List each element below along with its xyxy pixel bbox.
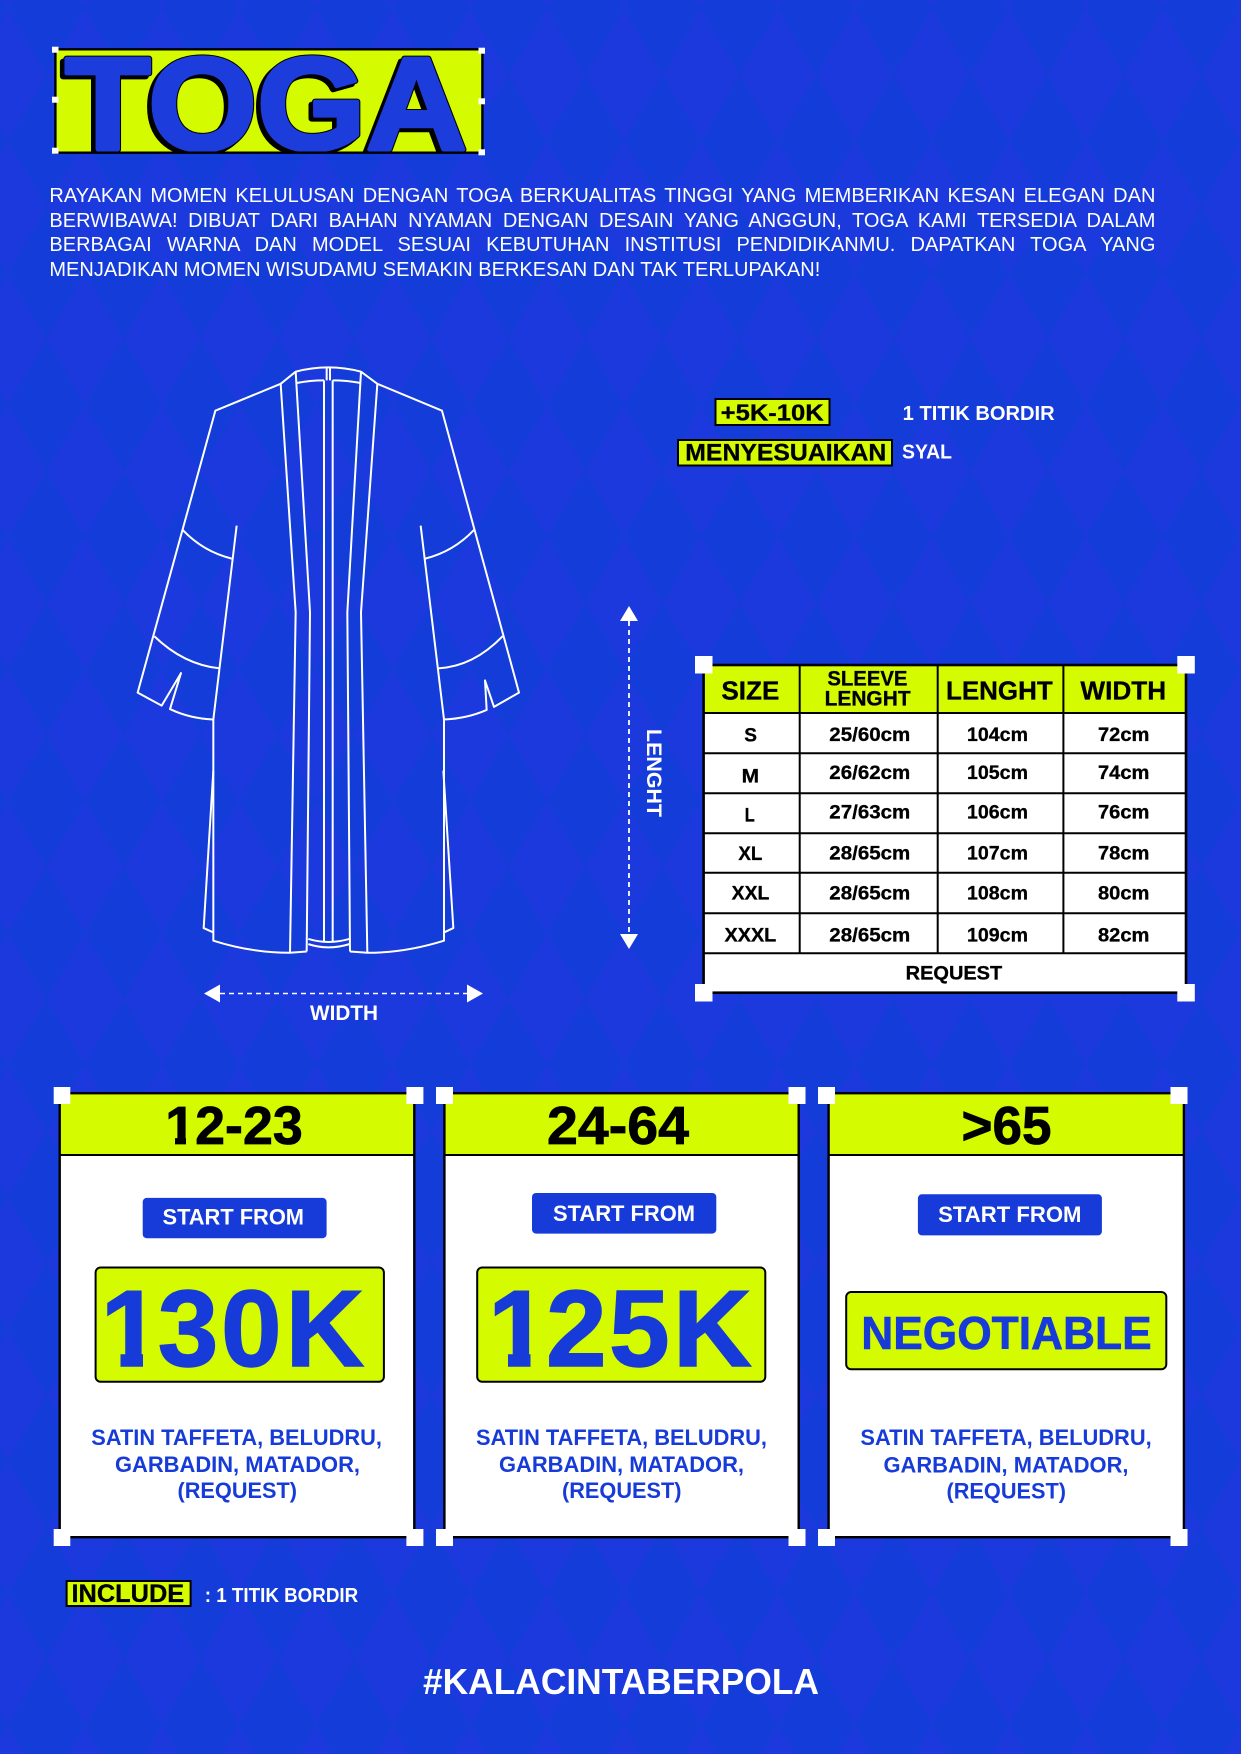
title: TOGA: TOGA: [65, 30, 467, 178]
table rows: M: [742, 766, 759, 787]
table rows: 105cm: [967, 763, 1028, 784]
materials: [91, 1425, 382, 1503]
materials: [860, 1425, 1152, 1504]
add-on: sash price: MENYESUAIKAN: [685, 440, 886, 467]
table rows: 107cm: [967, 843, 1028, 864]
table rows: 28/65cm: [829, 926, 910, 947]
start from label: START FROM: [162, 1205, 304, 1230]
panel: price over 65: [818, 1087, 1188, 1546]
table rows: 109cm: [967, 926, 1028, 947]
note: include: INCLUDE: [72, 1580, 184, 1608]
table rows: L: [745, 806, 755, 827]
table rows: XXL: [732, 883, 770, 904]
intro paragraph: MENJADIKAN MOMEN WISUDAMU SEMAKIN BERKESAN DAN TAK TERLUPAKAN!: [49, 259, 820, 281]
quantity range: 24-64: [547, 1096, 689, 1156]
note: include: : 1 TITIK BORDIR: [205, 1585, 359, 1607]
add-on: embroidery price: 1 TITIK BORDIR: [903, 403, 1055, 425]
materials: GARBADIN, MATADOR,: [884, 1452, 1128, 1478]
table rows: 74cm: [1098, 763, 1149, 784]
price: 125K: [488, 1268, 752, 1390]
price: NEGOTIABLE: [861, 1307, 1152, 1359]
materials: [476, 1425, 767, 1503]
table rows: 25/60cm: [829, 725, 910, 746]
table rows: XL: [738, 844, 763, 865]
table rows: 72cm: [1098, 725, 1149, 746]
add-on: embroidery price: +5K-10K: [721, 400, 824, 426]
arrow: length: [620, 606, 665, 949]
materials: SATIN TAFFETA, BELUDRU,: [476, 1425, 767, 1450]
table rows: 28/65cm: [829, 883, 910, 904]
table header: LENGHT: [946, 675, 1053, 705]
table rows: 26/62cm: [829, 763, 910, 784]
start from label: START FROM: [938, 1202, 1082, 1227]
hashtag: #KALACINTABERPOLA: [423, 1661, 819, 1702]
size table: [695, 656, 1195, 1002]
panel: price 24-64: [436, 1087, 806, 1546]
materials: (REQUEST): [562, 1478, 682, 1503]
table header: [721, 668, 1166, 711]
table rows: 80cm: [1098, 883, 1149, 904]
table rows: 27/63cm: [829, 802, 910, 823]
note: include: [67, 1580, 359, 1608]
intro paragraph: BERBAGAI WARNA DAN MODEL SESUAI KEBUTUHAN INSTITUSI PENDIDIKANMU. DAPATKAN TOGA YANG: [49, 234, 1155, 256]
table rows: S: [744, 726, 757, 747]
materials: GARBADIN, MATADOR,: [115, 1452, 360, 1477]
table rows: 76cm: [1098, 802, 1149, 823]
quantity range: >65: [962, 1096, 1052, 1156]
arrow: width: [204, 984, 483, 1025]
table header: SLEEVE: [827, 668, 907, 691]
add-on: embroidery price: [716, 399, 1055, 426]
price: 130K: [100, 1268, 364, 1390]
materials: GARBADIN, MATADOR,: [499, 1452, 744, 1477]
intro paragraph: [49, 185, 1155, 281]
materials: (REQUEST): [178, 1478, 297, 1503]
materials: SATIN TAFFETA, BELUDRU,: [91, 1425, 382, 1450]
title: TOGA: [52, 46, 485, 156]
start from label: [918, 1194, 1102, 1235]
table rows: 78cm: [1098, 843, 1149, 864]
table rows: 108cm: [967, 883, 1028, 904]
table header: LENGHT: [825, 688, 911, 711]
table rows: XXXL: [724, 926, 777, 947]
table rows: REQUEST: [906, 962, 1002, 984]
start from label: [532, 1193, 716, 1234]
table rows: 82cm: [1098, 926, 1149, 947]
add-on: sash price: SYAL: [902, 442, 952, 464]
label: width: WIDTH: [310, 1002, 378, 1025]
table rows: 106cm: [967, 802, 1028, 823]
intro paragraph: BERWIBAWA! DIBUAT DARI BAHAN NYAMAN DENGAN DESAIN YANG ANGGUN, TOGA KAMI TERSEDIA DALAM: [49, 210, 1155, 232]
intro paragraph: RAYAKAN MOMEN KELULUSAN DENGAN TOGA BERKUALITAS TINGGI YANG MEMBERIKAN KESAN ELEGAN DAN: [49, 185, 1155, 207]
illustration: graduation gown outline: [136, 366, 520, 954]
table rows: 28/65cm: [829, 843, 910, 864]
price: [846, 1292, 1166, 1369]
table header: WIDTH: [1080, 675, 1166, 705]
table header: SIZE: [721, 675, 779, 705]
title: TOGA: TOGA: [65, 30, 467, 178]
table rows: 104cm: [967, 725, 1028, 746]
quantity range: 12-23: [165, 1096, 303, 1156]
label: length: LENGHT: [642, 729, 665, 817]
start from label: START FROM: [553, 1201, 695, 1226]
panel: price 12-23: [54, 1087, 423, 1546]
materials: SATIN TAFFETA, BELUDRU,: [860, 1425, 1152, 1450]
start from label: [143, 1198, 327, 1238]
materials: (REQUEST): [946, 1478, 1066, 1504]
table rows: [724, 725, 1149, 984]
title: TOGA: TOGA: [62, 34, 464, 180]
